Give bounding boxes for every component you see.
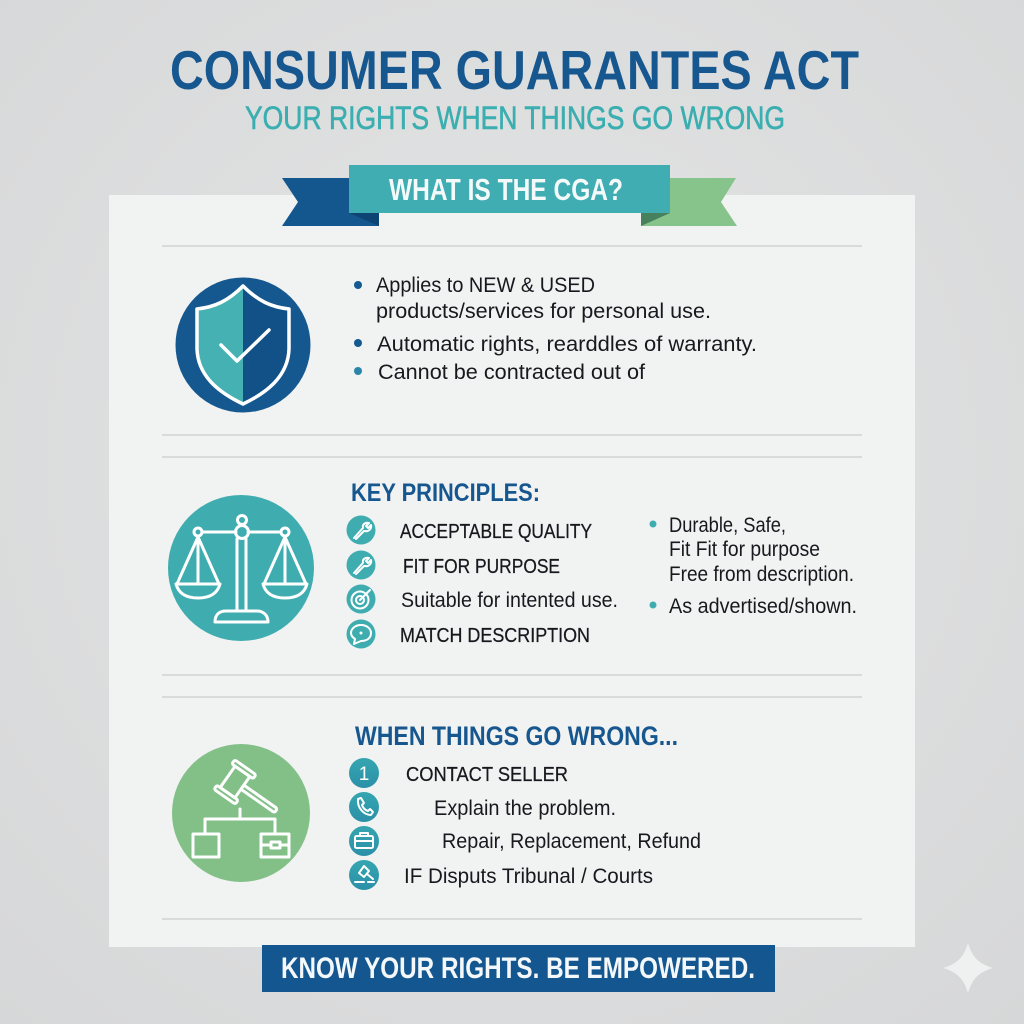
icon: wrench	[346, 516, 376, 544]
banner: what is the CGA	[282, 165, 737, 226]
text block: principle details: Free from description.	[669, 562, 854, 586]
label: disputes tribunal: IF Disputs Tribunal / Courts	[404, 864, 653, 888]
icon: wrench second	[346, 550, 376, 580]
text block: CGA bullets: Cannot be contracted out of	[378, 360, 645, 384]
label: contact seller: CONTACT SELLER	[406, 764, 568, 786]
subtitle: YOUR RIGHTS WHEN THINGS GO WRONG	[245, 100, 785, 136]
label: match description: MATCH DESCRIPTION	[400, 625, 590, 647]
icon: target	[346, 584, 376, 614]
list: steps	[349, 758, 701, 890]
heading: key principles: KEY PRINCIPLES:	[351, 479, 540, 507]
label: acceptable quality: ACCEPTABLE QUALITY	[400, 521, 592, 543]
title: CONSUMER GUARANTES ACT	[170, 39, 859, 101]
text block: principle details: As advertised/shown.	[669, 594, 857, 618]
list: key principles	[346, 516, 618, 648]
icon: speech bubble	[346, 620, 376, 648]
icon: step number one	[349, 758, 379, 788]
main panel	[109, 195, 915, 947]
footer banner: KNOW YOUR RIGHTS. BE EMPOWERED.	[281, 952, 755, 985]
text block: CGA bullets: products/services for personal use.	[376, 299, 711, 323]
icon: sparkle	[943, 943, 993, 993]
icon: phone	[349, 792, 379, 822]
text block: CGA bullets	[354, 273, 757, 384]
text block: CGA bullets: Applies to NEW & USED	[376, 273, 595, 297]
icon: small gavel	[349, 860, 379, 890]
label: remedies: Repair, Replacement, Refund	[442, 829, 701, 853]
label: suitable for intended use: Suitable for intented use.	[401, 588, 618, 612]
heading: when things go wrong: WHEN THINGS GO WRONG...	[355, 721, 678, 751]
text block: principle details: Durable, Safe,	[669, 513, 786, 537]
icon: briefcase	[349, 826, 379, 856]
icon: scales of justice	[168, 495, 314, 641]
icon: step number one: 1	[359, 764, 369, 785]
banner: what is the CGA: WHAT IS THE CGA?	[389, 172, 623, 207]
text block: principle details	[650, 513, 857, 618]
label: explain the problem: Explain the problem.	[434, 796, 616, 820]
text block: CGA bullets: Automatic rights, rearddles of warranty.	[377, 332, 757, 356]
footer banner	[262, 945, 775, 992]
label: fit for purpose: FIT FOR PURPOSE	[403, 556, 560, 578]
text block: principle details: Fit Fit for purpose	[669, 537, 820, 561]
icon: gavel and flowchart	[172, 744, 310, 882]
icon: shield with check	[176, 278, 310, 412]
